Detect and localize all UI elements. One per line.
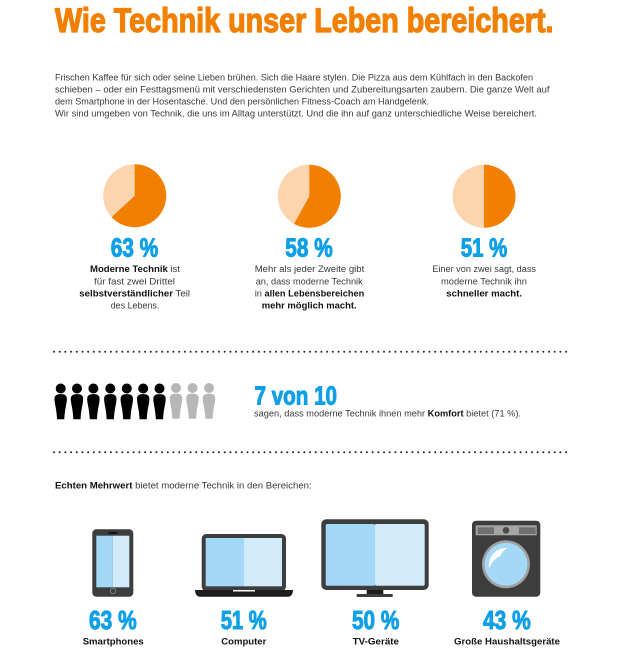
description: 51 percent: schneller macht. (446, 288, 522, 299)
icon: washing machine (472, 521, 540, 597)
description: 51 percent: moderne Technik ihn (441, 276, 527, 287)
description: 51 percent: Einer von zwei sagt, dass (432, 264, 536, 275)
panel: 58 percent statistic (255, 165, 365, 311)
section intro: Echten Mehrwert bietet moderne Technik in den Bereichen: (55, 480, 312, 491)
pie chart: 63 percent (103, 164, 166, 227)
intro text block: Wir sind umgeben von Technik, die uns im Alltag unterstützt. Und die ihn auf ganz unterschiedliche Weise bereichert. (55, 108, 537, 120)
figure: 7 von 10: 7 von 10 (254, 380, 337, 410)
label: Smartphones: Smartphones (83, 636, 144, 647)
intro text block: schieben – oder ein Festtagsmenü mit verschiedensten Gerichten und Zubereitungsarten zaubern. Die ganze Welt auf (55, 84, 550, 96)
panel: large household appliances (454, 521, 560, 647)
icon: smartphone (92, 529, 133, 597)
panel: smartphones (83, 529, 144, 647)
pie chart: 51 percent (452, 165, 516, 228)
description: 63 percent: Moderne Technik ist (90, 264, 180, 275)
icon: television (321, 519, 429, 597)
description: 58 percent (255, 264, 365, 311)
description: 58 percent: mehr möglich macht. (262, 300, 357, 311)
description: 63 percent (79, 264, 190, 311)
figure: 63 %: 63 % (89, 605, 137, 635)
figure: 51 %: 51 % (461, 232, 507, 262)
figure: 50 %: 50 % (352, 605, 399, 635)
figure: 58 %: 58 % (285, 232, 333, 262)
description: 58 percent: Mehr als jeder Zweite gibt (255, 264, 365, 275)
label: Große Haushaltsgeräte: Große Haushaltsgeräte (454, 636, 560, 647)
panel: TV (321, 519, 429, 647)
label: TV-Geräte: TV-Geräte (353, 636, 399, 647)
label: Computer: Computer (221, 636, 267, 647)
description: 58 percent: in allen Lebensbereichen (255, 288, 364, 299)
pie chart: 58 percent (278, 165, 341, 228)
figure: 51 %: 51 % (221, 605, 267, 635)
intro text block: dem Smartphone in der Hosentasche. Und den persönlichen Fitness-Coach am Handgelenk. (55, 96, 429, 108)
description: 63 percent: des Lebens. (111, 300, 159, 311)
description: 51 percent (432, 264, 536, 299)
description: 63 percent: für fast zwei Drittel (94, 276, 175, 287)
panel: computer (195, 534, 293, 647)
figure: 63 %: 63 % (111, 232, 158, 262)
panel: 63 percent statistic (79, 164, 190, 311)
comfort description: sagen, dass moderne Technik ihnen mehr Komfort bietet (71 %). (254, 408, 521, 420)
description: 58 percent: an, dass moderne Technik (256, 276, 363, 287)
description: 63 percent: selbstverständlicher Teil (79, 288, 190, 299)
figure: 43 %: 43 % (483, 605, 531, 635)
icon: laptop (195, 534, 293, 597)
panel: 51 percent statistic (432, 165, 536, 299)
intro text block: Frischen Kaffee für sich oder seine Lieben brühen. Sich die Haare stylen. Die Pizza aus dem Kühlfach in den Backofen (55, 72, 533, 84)
intro text block (55, 72, 550, 120)
icon row: 7 of 10 people (54, 383, 215, 419)
